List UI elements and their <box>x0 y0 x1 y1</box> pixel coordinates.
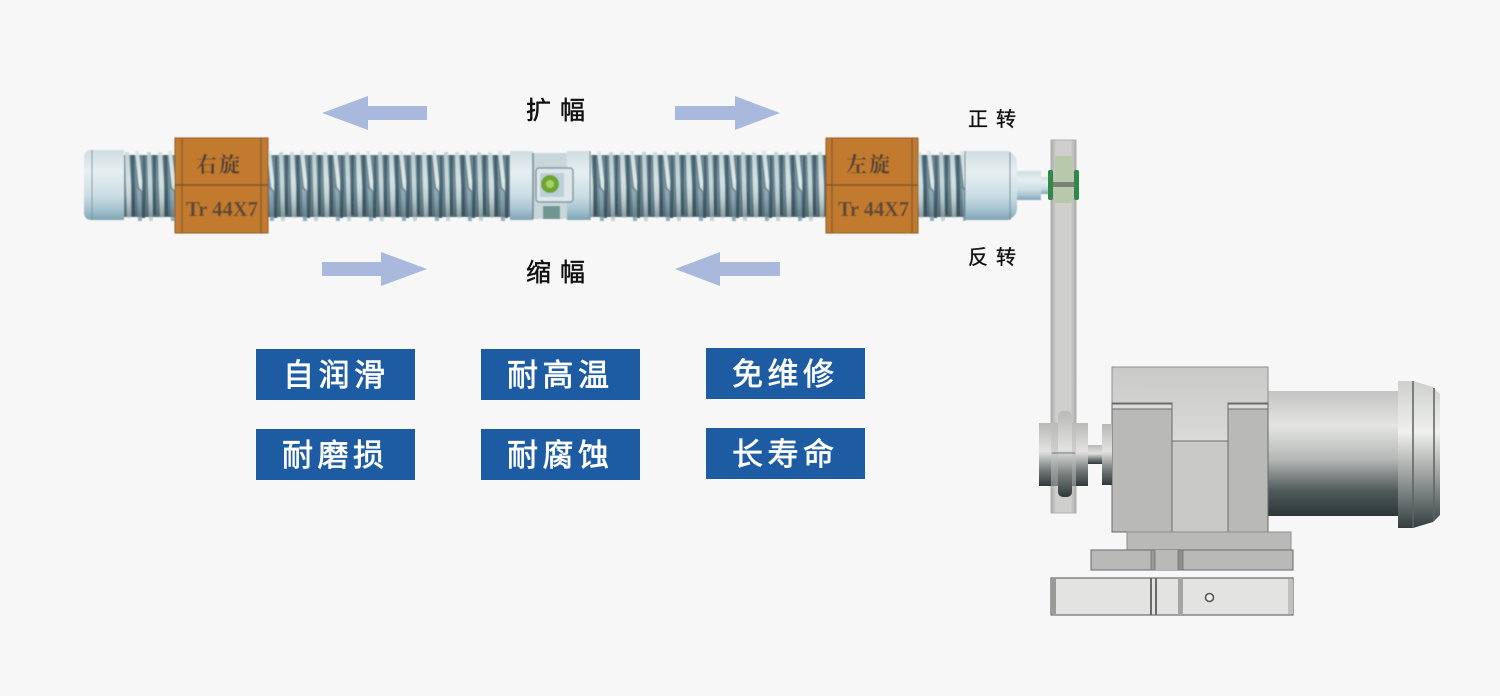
feature: maintenance free: 免维修 <box>732 357 838 392</box>
feature: maintenance free <box>706 348 865 399</box>
motor <box>1039 367 1440 615</box>
nut spec: Tr 44X7 <box>838 197 909 221</box>
right shaft end <box>965 151 1051 220</box>
green bolt <box>541 175 559 193</box>
right thread <box>590 150 965 222</box>
nut label: 左旋 <box>846 153 892 177</box>
label: reverse rotation: 反转 <box>968 246 1024 269</box>
belt <box>1048 140 1079 513</box>
arrow: expand left <box>322 96 427 130</box>
feature: corrosion resistant: 耐腐蚀 <box>507 438 614 473</box>
screw shaft assembly <box>84 138 1051 233</box>
left nut <box>175 138 268 233</box>
motor pulley <box>1039 411 1112 497</box>
upper sprocket <box>1048 156 1079 203</box>
feature: self lubricating: 自润滑 <box>283 358 390 393</box>
motor body <box>1268 391 1399 516</box>
feature: long life: 长寿命 <box>732 437 838 472</box>
bottom plate <box>1051 578 1293 615</box>
feature: wear resistant <box>256 429 415 480</box>
label: contract: 缩幅 <box>526 259 594 287</box>
left shaft end cap <box>84 150 124 220</box>
base <box>1091 532 1293 570</box>
feature: wear resistant: 耐磨损 <box>282 438 388 473</box>
label: forward rotation: 正转 <box>968 108 1024 131</box>
center coupling <box>510 151 590 220</box>
label: expand: 扩幅 <box>526 97 594 125</box>
nut spec: Tr 44X7 <box>186 197 258 221</box>
arrow: expand right <box>675 96 780 130</box>
arrow: contract right <box>322 252 427 286</box>
gearbox <box>1112 367 1268 532</box>
feature: long life <box>706 428 865 479</box>
feature: corrosion resistant <box>481 429 640 480</box>
left thread <box>124 150 510 222</box>
arrow: contract left <box>675 252 780 286</box>
feature: self lubricating <box>256 349 415 400</box>
nut label: 右旋 <box>196 153 242 177</box>
feature: high temperature: 耐高温 <box>507 358 614 393</box>
motor end cap <box>1398 381 1440 528</box>
right nut <box>826 138 918 233</box>
feature: high temperature <box>481 349 640 400</box>
